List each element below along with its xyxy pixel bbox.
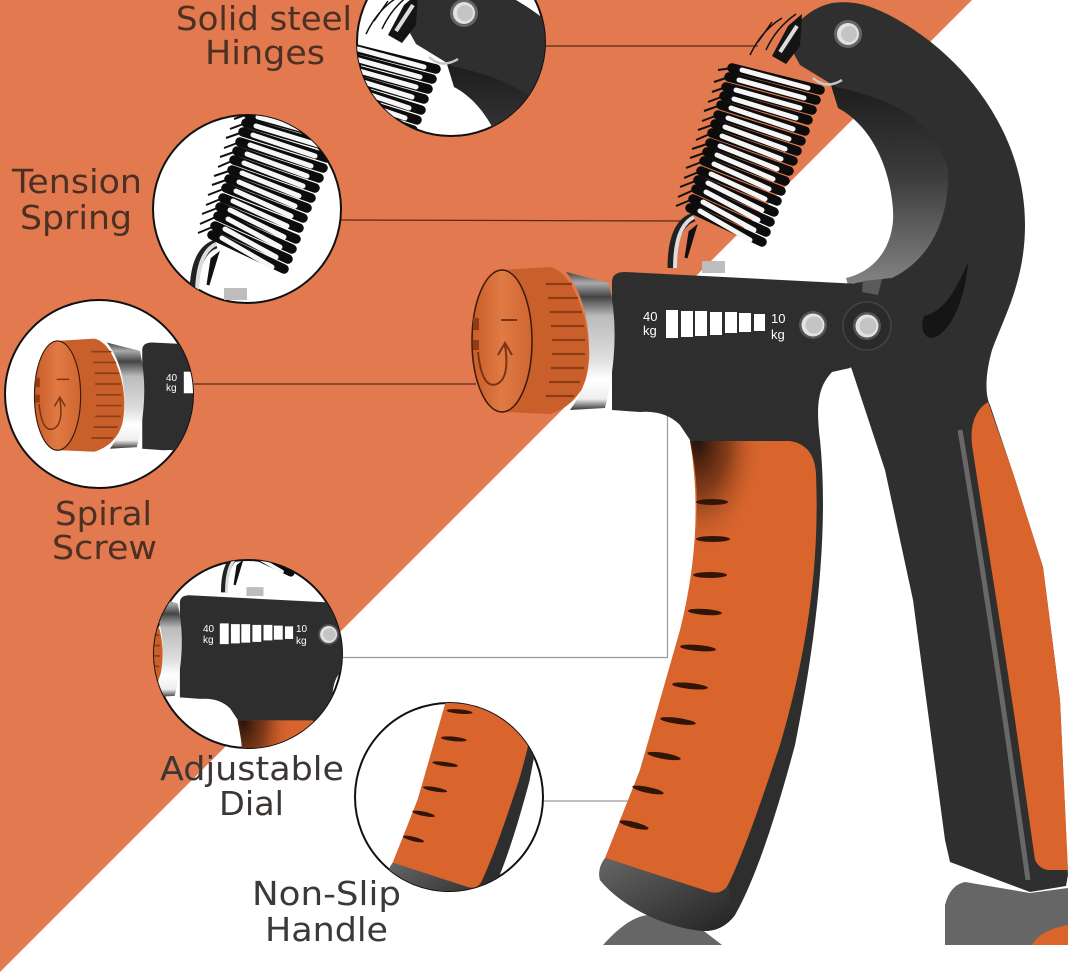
callout: non-slip handle circle: [354, 702, 544, 892]
label: Non-Slip Handle: Non-Slip: [252, 874, 401, 913]
connector: adjustable dial: [342, 412, 668, 658]
callout: spiral screw circle: [4, 299, 194, 489]
callout: adjustable dial circle: kg: [203, 635, 214, 646]
callout: spiral screw circle: kg: [166, 383, 177, 394]
label: Spiral Screw: [52, 494, 157, 567]
label: Non-Slip Handle: [252, 874, 401, 949]
callout: adjustable dial circle: 10: [296, 624, 308, 635]
callout: adjustable dial circle: kg: [296, 636, 307, 647]
label: Tension Spring: Spring: [20, 198, 132, 237]
callout: spiral screw circle: 40: [166, 373, 178, 384]
label: Solid steel Hinges: [176, 0, 352, 72]
connector: non-slip handle: [543, 800, 630, 802]
callout: tension spring circle: [152, 114, 342, 304]
callout: adjustable dial circle: [153, 559, 343, 749]
callout: adjustable dial circle: 40: [203, 624, 215, 635]
scale label: 10 kg: 10: [771, 311, 785, 326]
label: Spiral Screw: Screw: [52, 528, 157, 567]
label: Adjustable Dial: Dial: [219, 784, 284, 823]
label: Solid steel Hinges: Solid steel: [176, 0, 352, 38]
label: Tension Spring: [11, 162, 142, 237]
scale label: 40 kg: 40: [643, 309, 657, 324]
callout: solid steel hinges circle: [356, 0, 546, 137]
label: Tension Spring: Tension: [11, 162, 142, 201]
scale label: 40 kg: kg: [643, 323, 657, 338]
label: Non-Slip Handle: Handle: [265, 910, 388, 949]
scale label: 10 kg: kg: [771, 327, 785, 342]
floor reflection: [603, 882, 1068, 945]
label: Adjustable Dial: Adjustable: [160, 749, 344, 788]
label: Solid steel Hinges: Hinges: [205, 33, 325, 72]
connector: spiral screw: [194, 383, 476, 385]
label: Adjustable Dial: [160, 749, 344, 823]
label: Spiral Screw: Spiral: [55, 494, 152, 533]
connector: solid steel hinges: [545, 45, 758, 47]
main product: hand gripper: [472, 2, 1068, 931]
connector: tension spring: [341, 220, 685, 221]
